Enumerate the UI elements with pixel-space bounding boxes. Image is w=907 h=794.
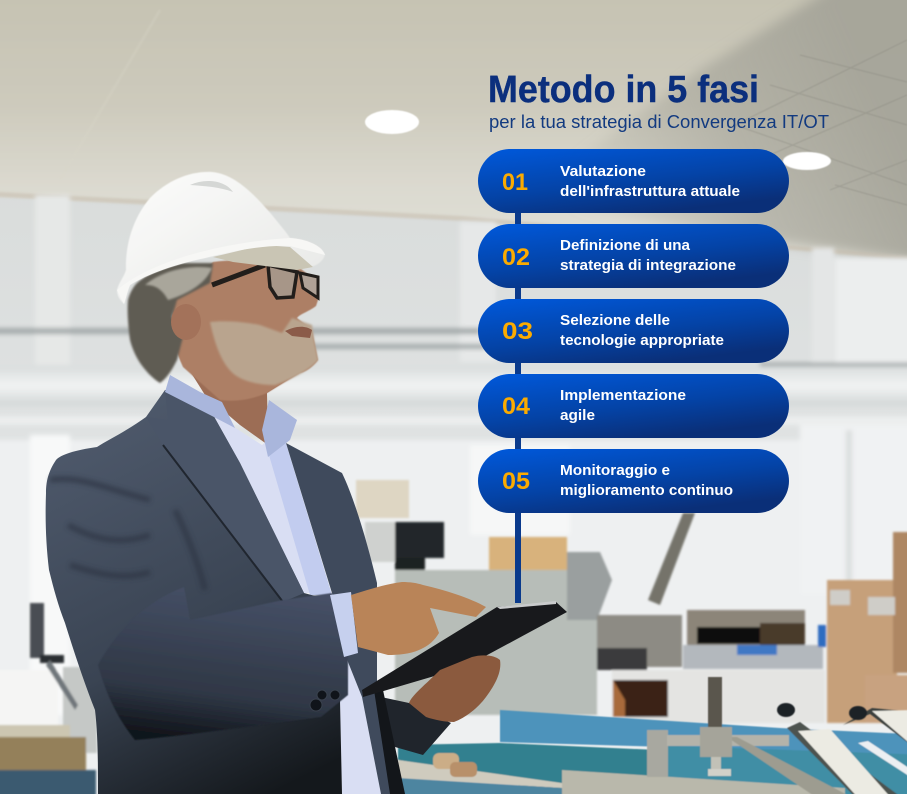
step 02 xyxy=(478,224,789,288)
step 04: agile xyxy=(560,407,595,424)
step 03: tecnologie appropriate xyxy=(560,332,724,349)
ceiling xyxy=(0,0,907,265)
jacket body xyxy=(46,390,342,794)
step 01: 01 xyxy=(502,169,528,196)
step 03 xyxy=(478,299,789,363)
ceiling lights xyxy=(365,110,831,170)
step 02: Definizione di una xyxy=(560,237,691,254)
step 03: 03 xyxy=(502,318,533,345)
far sleeve xyxy=(372,695,451,755)
shirt collar xyxy=(165,375,297,457)
step 05: Monitoraggio e xyxy=(560,462,670,479)
connector line xyxy=(515,205,521,603)
step 05: miglioramento continuo xyxy=(560,482,733,499)
step 02: strategia di integrazione xyxy=(560,257,736,274)
step 02: 02 xyxy=(502,244,530,271)
hair xyxy=(128,263,213,383)
glasses xyxy=(212,265,318,298)
step 04: 04 xyxy=(502,393,531,420)
shirt cuff xyxy=(330,592,358,657)
step 01: Valutazione xyxy=(560,163,646,180)
step 04: Implementazione xyxy=(560,387,686,404)
pointing hand xyxy=(351,582,486,655)
step 01 xyxy=(478,149,789,213)
step 05: 05 xyxy=(502,468,530,495)
machinery and boxes xyxy=(0,480,907,794)
forearm sleeve xyxy=(98,587,348,740)
sleeve folds xyxy=(50,479,205,590)
conveyor belt xyxy=(398,677,907,794)
step 04 xyxy=(478,374,789,438)
tablet xyxy=(362,602,567,697)
shirt placket xyxy=(266,440,332,595)
hair highlights xyxy=(145,267,212,300)
head xyxy=(117,172,325,401)
lips xyxy=(285,327,312,338)
jacket right panel xyxy=(286,443,405,794)
person: engineer with hard hat and tablet xyxy=(46,172,567,794)
step 01: dell'infrastruttura attuale xyxy=(560,183,740,200)
ear and face xyxy=(172,260,318,401)
title: Metodo in 5 fasi xyxy=(488,69,759,111)
wall xyxy=(0,180,907,794)
step 03: Selezione delle xyxy=(560,312,670,329)
sleeve buttons xyxy=(310,690,340,711)
wall columns and pipes xyxy=(0,195,907,794)
subtitle: per la tua strategia di Convergenza IT/OT xyxy=(489,111,829,132)
hard hat xyxy=(117,172,325,304)
step 05 xyxy=(478,449,789,513)
neck xyxy=(183,330,300,445)
jacket lapel xyxy=(146,390,304,602)
shirt body xyxy=(212,413,381,794)
beard xyxy=(210,318,318,385)
holding hand xyxy=(409,655,500,722)
ear xyxy=(171,304,201,340)
